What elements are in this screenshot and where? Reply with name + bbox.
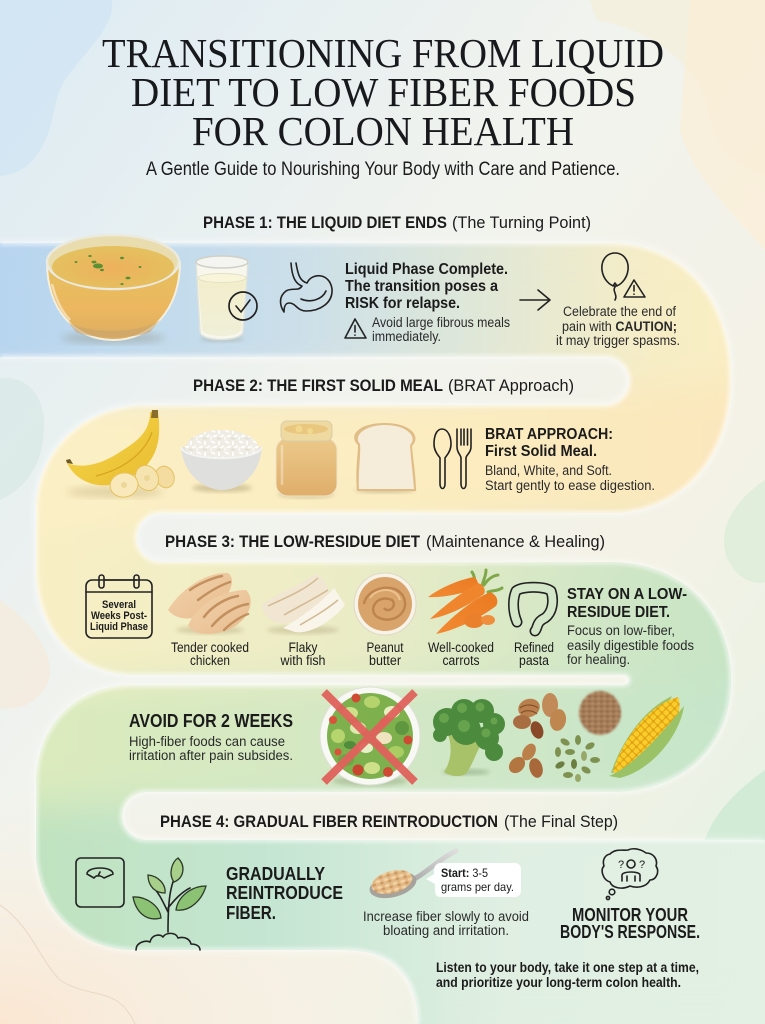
icon: colon — [514, 587, 553, 631]
text: BRAT approach: Bland, White, and Soft. — [485, 463, 612, 478]
text: stay on a low-residue diet: Focus on low-fiber, — [567, 623, 675, 638]
closing message: and prioritize your long-term colon health. — [436, 975, 681, 990]
icon: carrots — [428, 570, 502, 634]
labels: low-residue foods: Well-cooked — [428, 640, 494, 655]
text: monitor your body's response — [560, 905, 700, 942]
icon: stomach — [280, 263, 332, 312]
icon: bowl of rice — [181, 430, 262, 492]
text: avoid for 2 weeks: irritation after pain subsides. — [129, 748, 293, 763]
callout: start fiber amount — [426, 863, 521, 897]
ribbon pathway — [0, 240, 765, 1024]
text: avoid fibrous meals: Avoid large fibrous meals — [372, 315, 510, 330]
title: FOR COLON HEALTH — [192, 108, 574, 154]
labels: low-residue foods: pasta — [519, 653, 549, 668]
text: liquid phase complete — [345, 261, 508, 312]
icon: warning triangle — [345, 319, 366, 338]
text: monitor your body's response: BODY'S RESPONSE. — [560, 922, 700, 942]
heading: phase 4: (The Final Step) — [504, 812, 618, 831]
icon: slice of bread — [354, 423, 416, 493]
text: gradually reintroduce fiber — [226, 864, 343, 923]
heading: phase 1: PHASE 1: THE LIQUID DIET ENDS — [203, 213, 447, 232]
text: BRAT approach: BRAT APPROACH: — [485, 426, 613, 443]
icon: balloon with warning — [602, 253, 645, 300]
heading: phase 1: (The Turning Point) — [452, 213, 591, 232]
labels: low-residue foods — [171, 640, 554, 668]
text: monitor your body's response: MONITOR YOUR — [572, 905, 688, 925]
text: stay on a low-residue diet: STAY ON A LOW- — [567, 586, 687, 603]
icon: sprout — [133, 858, 206, 950]
text: liquid phase complete: Liquid Phase Complete. — [345, 261, 508, 278]
heading: phase 3: PHASE 3: THE LOW-RESIDUE DIET — [165, 532, 421, 551]
title: TRANSITIONING FROM LIQUID — [102, 30, 664, 76]
text: avoid for 2 weeks: High-fiber foods can cause — [129, 734, 285, 749]
icon: calendar: Liquid Phase — [90, 621, 148, 633]
icon: thought bubble: ? — [639, 859, 645, 871]
icon: nuts and almonds — [506, 693, 568, 779]
text: stay on a low-residue diet: for healing. — [567, 652, 630, 667]
icon: applesauce jar — [276, 421, 337, 498]
icon: peanut butter — [354, 573, 416, 635]
labels: low-residue foods: Flaky — [288, 640, 318, 655]
closing message — [436, 960, 699, 990]
icon: flaky fish — [262, 573, 345, 634]
text: gradually reintroduce fiber: GRADUALLY — [226, 864, 325, 884]
text: increase fiber slowly: bloating and irritation. — [383, 923, 509, 938]
icon: thought bubble — [602, 849, 658, 900]
icon: spoon and fork — [434, 429, 471, 488]
icon: broth bowl — [47, 235, 180, 343]
labels: low-residue foods: butter — [369, 653, 401, 668]
labels: low-residue foods: Tender cooked — [171, 640, 249, 655]
callout: start fiber amount: Start: 3-5 — [441, 866, 488, 880]
title — [102, 30, 664, 154]
labels: low-residue foods: Peanut — [366, 640, 404, 655]
icon: calendar: Several — [102, 599, 136, 611]
closing message: Listen to your body, take it one step at a time, — [436, 960, 699, 975]
text: gradually reintroduce fiber: FIBER. — [226, 903, 276, 923]
icon: flax seeds — [579, 691, 621, 735]
text: avoid for 2 weeks — [129, 711, 293, 763]
icon: weighing scale — [76, 858, 124, 907]
title: DIET TO LOW FIBER FOODS — [131, 69, 636, 115]
heading: phase 2: (BRAT Approach) — [448, 376, 574, 395]
text: celebrate with caution — [556, 304, 680, 348]
labels: low-residue foods: with fish — [280, 653, 326, 668]
icon: banana — [66, 410, 177, 499]
icon: cooked chicken — [168, 573, 251, 634]
icon: calendar: Weeks Post- — [91, 610, 147, 622]
labels: low-residue foods: Refined — [514, 640, 554, 655]
icon: check mark — [229, 292, 257, 320]
labels: low-residue foods: chicken — [190, 653, 230, 668]
text: stay on a low-residue diet: easily digestible foods — [567, 638, 694, 653]
icon: crossed-out salad — [320, 687, 420, 786]
heading: phase 3: (Maintenance & Healing) — [426, 532, 605, 551]
text: celebrate with caution: pain with CAUTION; — [562, 319, 677, 334]
icon: calendar — [86, 575, 152, 638]
text: stay on a low-residue diet: RESIDUE DIET. — [567, 604, 670, 621]
text: increase fiber slowly — [363, 909, 529, 938]
text: liquid phase complete: The transition poses a — [345, 278, 498, 295]
heading: phase 2: PHASE 2: THE FIRST SOLID MEAL — [193, 376, 443, 395]
text: avoid fibrous meals: immediately. — [372, 329, 441, 344]
icon: thought bubble: ? — [618, 859, 624, 871]
labels: low-residue foods: carrots — [442, 653, 480, 668]
text: celebrate with caution: Celebrate the end of — [563, 304, 676, 319]
heading: phase 4: PHASE 4: GRADUAL FIBER REINTRODUCTION — [160, 812, 498, 831]
text: celebrate with caution: it may trigger spasms. — [556, 333, 680, 348]
arrow — [520, 290, 550, 310]
text: avoid for 2 weeks: AVOID FOR 2 WEEKS — [129, 711, 293, 731]
callout: start fiber amount: grams per day. — [441, 880, 514, 894]
icon: spoon of fiber — [367, 851, 456, 903]
icon: corn cob — [609, 696, 684, 778]
text: stay on a low-residue diet — [567, 586, 694, 667]
text: BRAT approach: First Solid Meal. — [485, 443, 597, 460]
text: liquid phase complete: RISK for relapse. — [345, 295, 460, 312]
text: avoid fibrous meals — [372, 315, 510, 344]
subtitle: A Gentle Guide to Nourishing Your Body with Care and Patience. — [146, 159, 620, 180]
icon: broccoli — [433, 699, 505, 776]
text: increase fiber slowly: Increase fiber slowly to avoid — [363, 909, 529, 924]
icon: glass of clear liquid — [196, 256, 248, 342]
text: BRAT approach: Start gently to ease digestion. — [485, 478, 655, 493]
text: BRAT approach — [485, 426, 655, 493]
heading: phase 3 — [165, 532, 605, 551]
icon: pumpkin seeds — [554, 735, 600, 782]
text: gradually reintroduce fiber: REINTRODUCE — [226, 883, 343, 903]
